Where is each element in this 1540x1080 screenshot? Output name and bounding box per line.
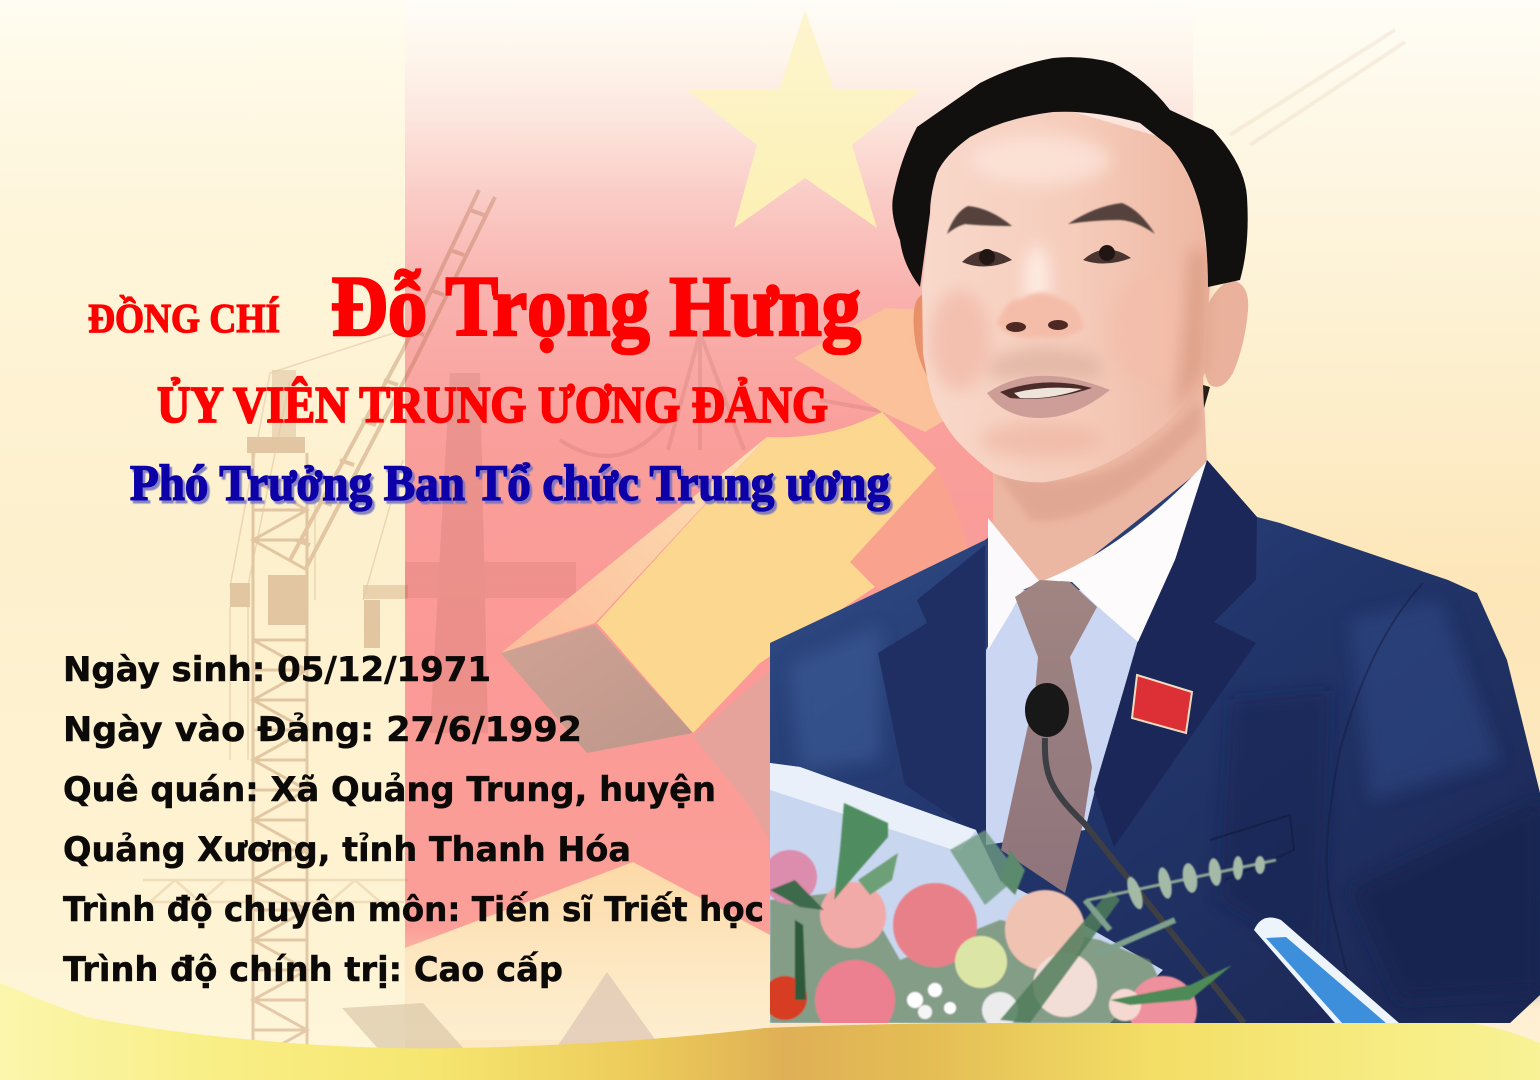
blue pen	[1254, 918, 1399, 1023]
crane inside red panel	[405, 333, 930, 733]
chin shadow	[1001, 408, 1200, 520]
position: deputy head: Phó Trưởng Ban Tổ chức Trung ương	[130, 456, 890, 512]
eyes	[962, 245, 1131, 267]
home town line 1: Quê quán: Xã Quảng Trung, huyện	[63, 770, 716, 810]
suit shading	[790, 600, 1540, 1000]
jacket pocket	[1210, 815, 1294, 880]
necktie	[1001, 580, 1097, 893]
mouth	[987, 376, 1110, 418]
sleeve seam	[1327, 583, 1423, 1022]
party admission date: Ngày vào Đảng: 27/6/1992	[63, 710, 582, 750]
position: central committee member: ỦY VIÊN TRUNG ƯƠNG ĐẢNG	[157, 376, 828, 434]
biography details	[63, 650, 764, 990]
photo: speaker	[763, 57, 1540, 1044]
emblem: yellow star	[687, 10, 921, 228]
emblem: hammer and sickle	[405, 308, 970, 1080]
sickle lower blade	[850, 468, 970, 590]
small hair behind ear	[1203, 385, 1210, 408]
lapel pin	[1132, 675, 1192, 733]
face	[922, 105, 1210, 482]
date of birth: Ngày sinh: 05/12/1971	[63, 650, 491, 690]
ear left	[914, 295, 928, 378]
flower bouquet	[763, 803, 1276, 1044]
construction cranes	[143, 190, 495, 1080]
left lapel	[878, 545, 986, 840]
hammer main face	[597, 412, 936, 733]
political qualification: Trình độ chính trị: Cao cấp	[63, 950, 563, 990]
microphone	[1025, 683, 1244, 1023]
professional qualification: Trình độ chuyên môn: Tiến sĩ Triết học	[63, 890, 764, 930]
shirt collar right	[1045, 460, 1210, 642]
leaves	[770, 803, 1232, 1023]
hair	[892, 57, 1248, 287]
face shading	[930, 135, 1208, 458]
bouquet foliage base	[770, 890, 1180, 1023]
right lapel	[1094, 460, 1257, 847]
hammer light face	[501, 437, 767, 653]
faded quadrilateral	[342, 1003, 474, 1060]
flowers	[770, 849, 1198, 1023]
eucalyptus sprig	[1085, 856, 1276, 955]
name: Đỗ Trọng Hưng	[331, 258, 861, 354]
home town line 2: Quảng Xương, tỉnh Thanh Hóa	[63, 830, 631, 870]
nose	[997, 292, 1084, 338]
suit jacket	[770, 460, 1540, 1023]
eyebrows	[947, 203, 1155, 234]
right-side crane traces	[1230, 30, 1405, 145]
sickle upper blade	[794, 308, 945, 432]
shirt	[986, 590, 1138, 845]
ear right	[1203, 280, 1248, 387]
shirt collar left	[988, 518, 1040, 650]
lower cream area	[405, 862, 770, 1040]
label: đồng chí: ĐỒNG CHÍ	[88, 295, 280, 341]
faded triangles	[558, 972, 654, 1044]
hammer shadow face	[501, 625, 693, 753]
title line: đồng chí and name	[88, 258, 861, 354]
handle shadow strip	[693, 670, 770, 840]
neck	[988, 375, 1207, 590]
bottom gold wave	[0, 983, 1540, 1080]
document held	[770, 763, 1163, 1023]
